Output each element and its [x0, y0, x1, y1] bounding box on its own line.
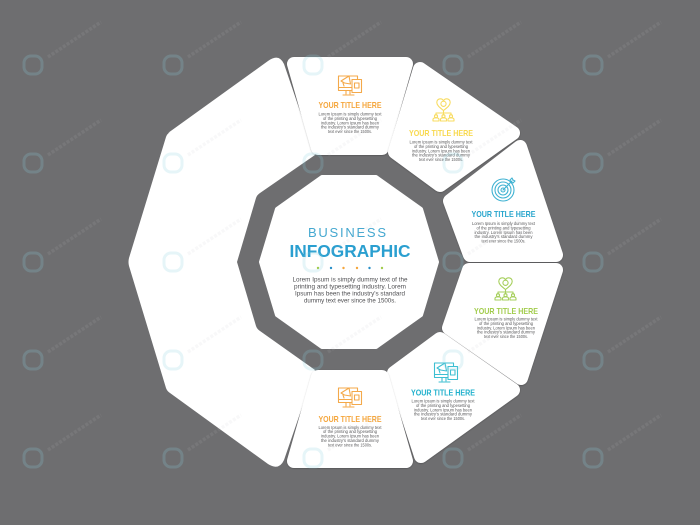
text block: yellow card body: Lorem Ipsum is simply dummy text	[410, 140, 473, 144]
text block: cyan card body: text ever since the 1500s.	[421, 416, 465, 421]
icon: monitor with megaphone, cyan	[434, 363, 458, 382]
icon: target with arrow	[492, 178, 515, 201]
text block: yellow card body: the industry's standard dummy	[412, 153, 471, 158]
text block: orange card body: of the printing and typesetting	[323, 116, 378, 121]
text block: central description: printing and typesetting industry. Lorem	[294, 284, 406, 290]
text block: green card body: of the printing and typesetting	[479, 321, 534, 326]
panel: top orange card	[294, 64, 406, 148]
panel: central decagon	[261, 177, 437, 347]
text block: orange card body	[318, 112, 382, 134]
text block: blue card body: the industry's standard dummy	[474, 234, 533, 239]
text block: yellow card body	[410, 140, 473, 162]
text block: central description: dummy text ever since the 1500s.	[304, 298, 396, 304]
heading: blue card title: YOUR TITLE HERE	[472, 209, 536, 219]
dotted row	[317, 267, 383, 269]
panel: cyan card	[394, 339, 513, 456]
heading: yellow card title: YOUR TITLE HERE	[409, 128, 473, 138]
text block: green card body: Lorem Ipsum is simply dummy text	[474, 316, 538, 322]
panel: blue target card	[450, 147, 556, 255]
text block: cyan card body: the industry's standard dummy	[414, 412, 473, 417]
icon: team with heart, green	[495, 278, 516, 300]
text block: green card body: industry. Lorem Ipsum has been	[477, 325, 536, 330]
text block: cyan card body: of the printing and typesetting	[416, 403, 471, 408]
text block: orange card body: Lorem Ipsum is simply dummy text	[318, 112, 382, 116]
panel: large blank left segment	[128, 58, 315, 467]
text block: bottom orange card body: the industry's standard dummy	[321, 438, 380, 443]
text block: central description: Lorem Ipsum is simply dummy text of the	[292, 276, 408, 284]
panel: yellow card	[395, 69, 513, 185]
text block: green card body: the industry's standard dummy	[477, 330, 536, 335]
heading: infographic: INFOGRAPHIC	[290, 241, 411, 261]
text block: blue card body	[472, 221, 536, 244]
icon: monitor with megaphone, orange	[338, 76, 362, 95]
text block: green card body: text ever since the 1500s.	[484, 334, 528, 339]
panel: bottom orange card	[294, 377, 406, 461]
text block: yellow card body: of the printing and typesetting	[414, 144, 469, 149]
icon: monitor with megaphone, bottom orange	[338, 388, 362, 407]
text block: blue card body: of the printing and typesetting	[476, 225, 531, 230]
heading: orange card title: YOUR TITLE HERE	[318, 100, 382, 110]
text block: cyan card body	[412, 398, 475, 421]
text block: bottom orange card body: of the printing and typesetting	[323, 429, 378, 434]
text block: cyan card body: Lorem Ipsum is simply dummy text	[412, 398, 475, 404]
text block: yellow card body: industry. Lorem Ipsum has been	[412, 148, 471, 153]
text block: bottom orange card body	[318, 425, 382, 447]
text block: central description	[292, 276, 408, 304]
text block: cyan card body: industry. Lorem Ipsum has been	[414, 407, 473, 412]
text block: blue card body: industry. Lorem Ipsum has been	[474, 230, 533, 235]
text block: bottom orange card body: text ever since the 1500s.	[328, 442, 372, 447]
text block: central description: Ipsum has been the industry's standard	[295, 290, 405, 298]
icon: team with heart, yellow	[433, 99, 454, 121]
text block: orange card body: the industry's standard dummy	[321, 125, 380, 130]
text block: green card body	[474, 316, 538, 339]
heading: green card title: YOUR TITLE HERE	[474, 306, 538, 316]
heading: business: BUSINESS	[308, 225, 386, 240]
heading: bottom orange card title: YOUR TITLE HERE	[318, 414, 382, 424]
text block: bottom orange card body: Lorem Ipsum is simply dummy text	[318, 425, 382, 430]
text block: blue card body: Lorem Ipsum is simply dummy text	[472, 221, 536, 226]
text block: blue card body: text ever since the 1500s.	[482, 239, 526, 244]
text block: orange card body: industry. Lorem Ipsum has been	[321, 120, 380, 125]
heading: cyan card title: YOUR TITLE HERE	[411, 388, 475, 398]
watermark marks	[24, 22, 661, 467]
text block: bottom orange card body: industry. Lorem Ipsum has been	[321, 434, 380, 439]
text block: orange card body: text ever since the 1500s.	[328, 129, 372, 134]
panel: green card	[449, 270, 556, 378]
text block: yellow card body: text ever since the 1500s.	[419, 157, 463, 162]
